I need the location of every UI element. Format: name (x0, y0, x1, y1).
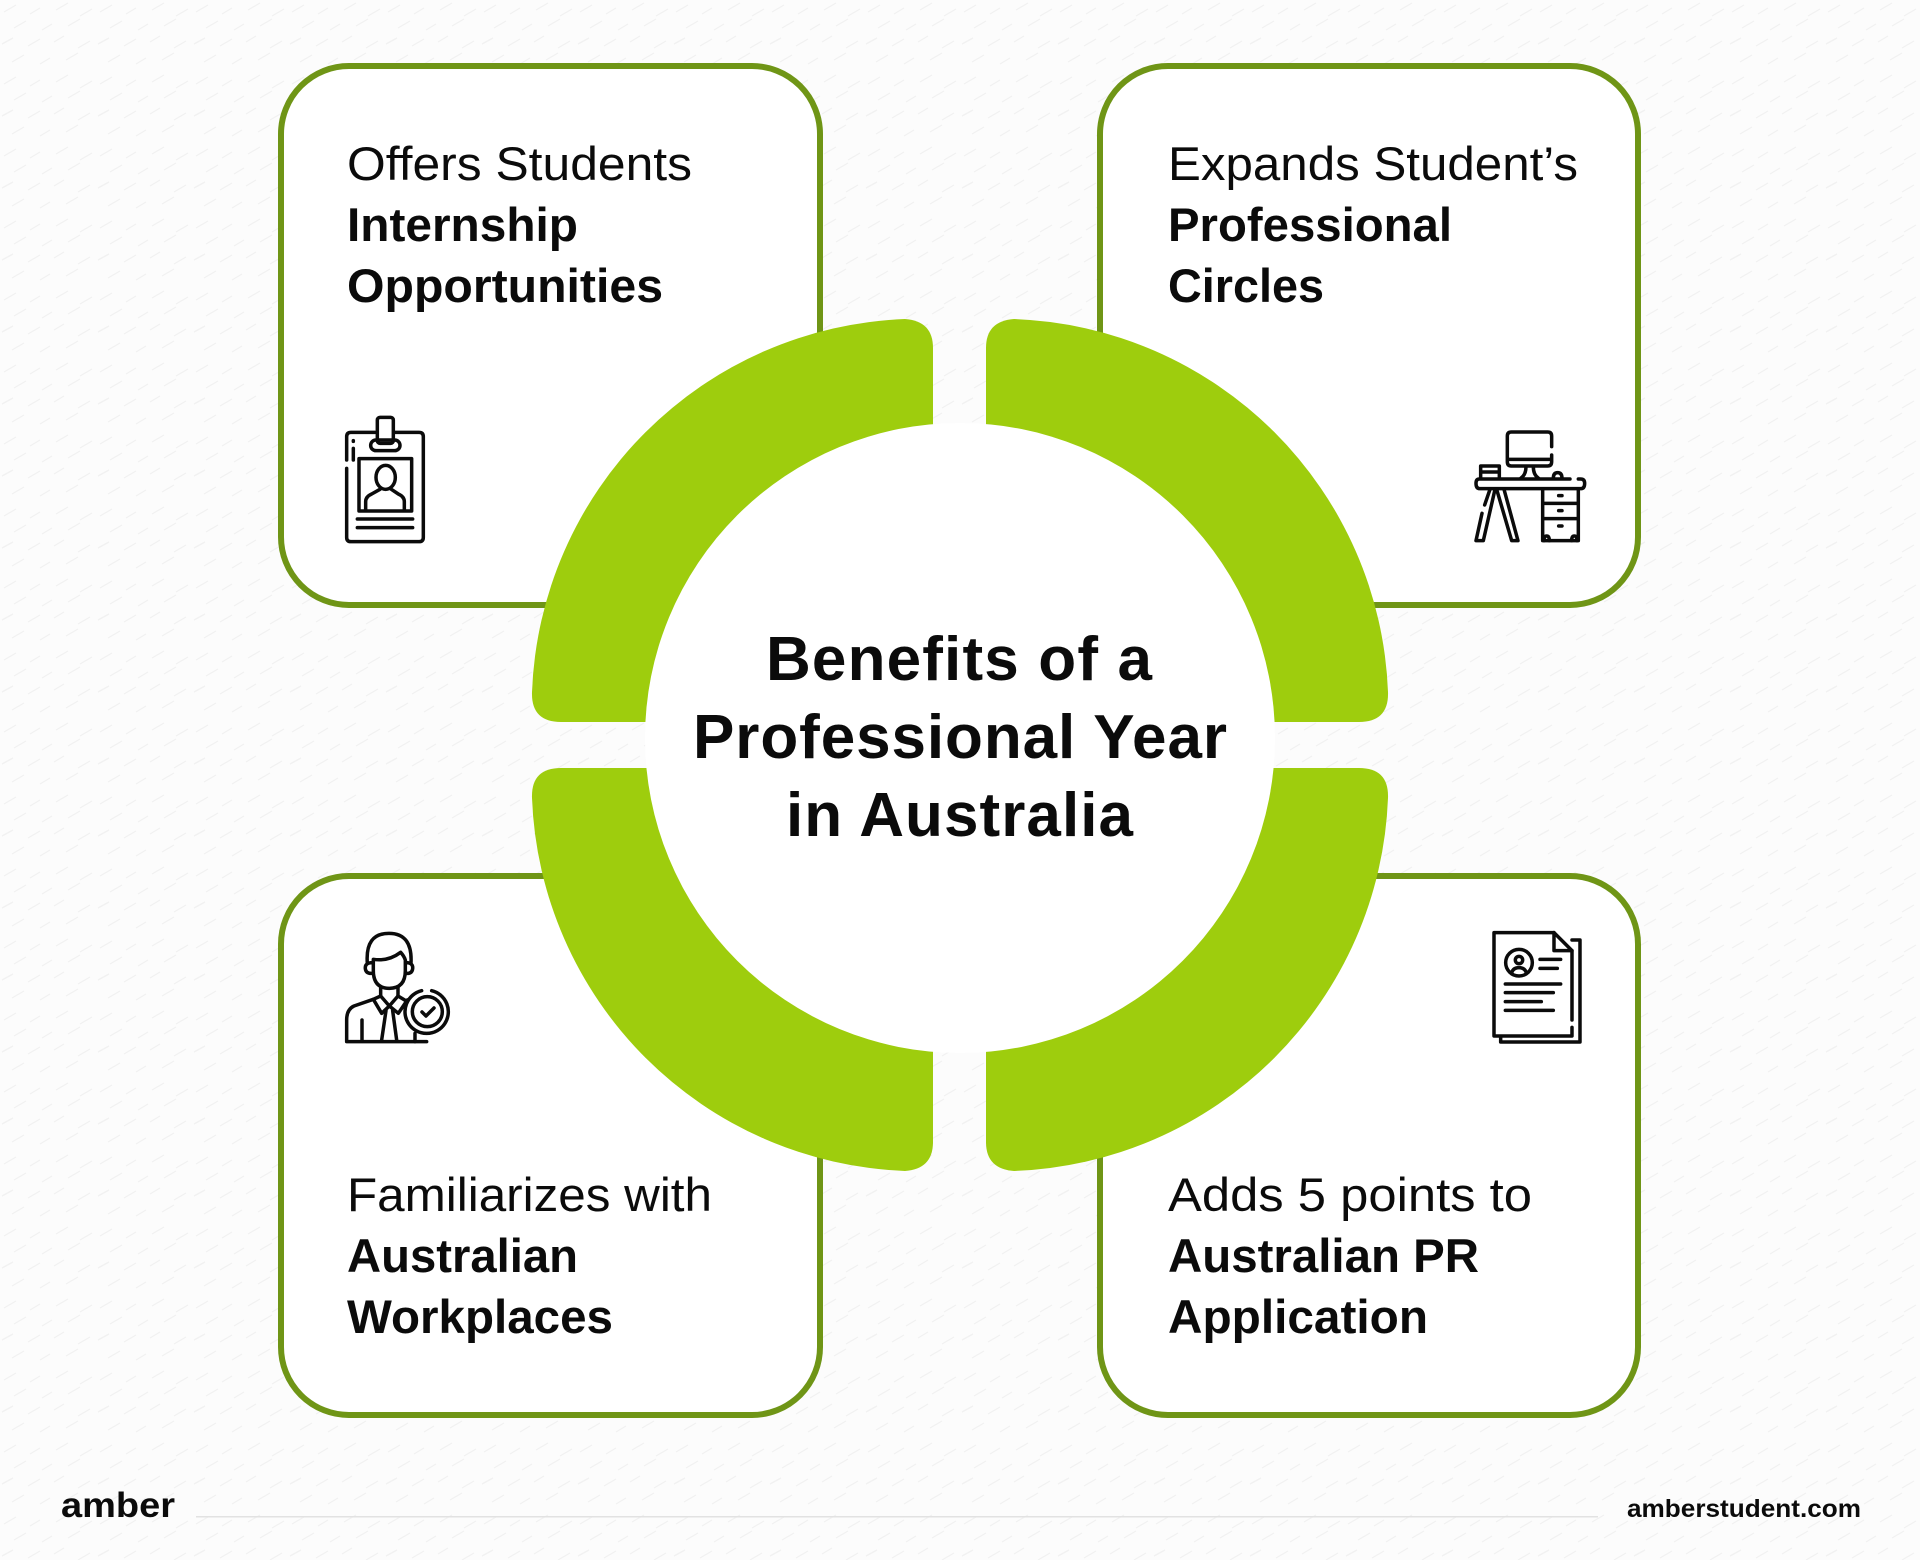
card text: Familiarizes with (347, 1168, 712, 1221)
card text: Offers Students (347, 137, 692, 190)
card text: Internship (347, 198, 578, 251)
card text: Circles (1168, 259, 1324, 312)
panel: professional circles (1100, 66, 1638, 605)
card text (1168, 137, 1578, 312)
center disc (645, 423, 1275, 1053)
card frame (281, 66, 820, 605)
icon: office desk (1476, 432, 1585, 541)
card text: Expands Student’s (1168, 137, 1578, 190)
ring segment: bottom left (532, 768, 933, 1171)
card frame (281, 876, 820, 1415)
title: in Australia (786, 781, 1134, 850)
card frame (1100, 876, 1638, 1415)
title (693, 625, 1227, 850)
card frame (1100, 66, 1638, 605)
card text (1168, 1168, 1532, 1343)
card text (347, 137, 692, 312)
website: amberstudent.com (1627, 1495, 1861, 1523)
ring segment: top left (532, 319, 933, 722)
panel: australian pr application (1100, 876, 1638, 1415)
icon: employee with check badge (347, 933, 448, 1042)
card text: Adds 5 points to (1168, 1168, 1532, 1221)
card text: Opportunities (347, 259, 663, 312)
ring segment: top right (986, 319, 1388, 722)
title: Professional Year (693, 703, 1227, 772)
title: Benefits of a (766, 625, 1153, 694)
card text: Professional (1168, 198, 1452, 251)
panel: internship opportunities (281, 66, 820, 605)
footer rule (196, 1516, 1598, 1518)
brand logo: amber (61, 1486, 175, 1525)
center ring (532, 319, 1388, 1171)
ring segment: bottom right (986, 768, 1388, 1171)
card text: Australian (347, 1229, 578, 1282)
icon: resume document (1494, 933, 1580, 1042)
footer (61, 1486, 1861, 1525)
icon: id badge (347, 417, 423, 542)
card text: Application (1168, 1290, 1428, 1343)
card text: Workplaces (347, 1290, 613, 1343)
card text: Australian PR (1168, 1229, 1479, 1282)
panel: australian workplaces (281, 876, 820, 1415)
card text (347, 1168, 712, 1343)
